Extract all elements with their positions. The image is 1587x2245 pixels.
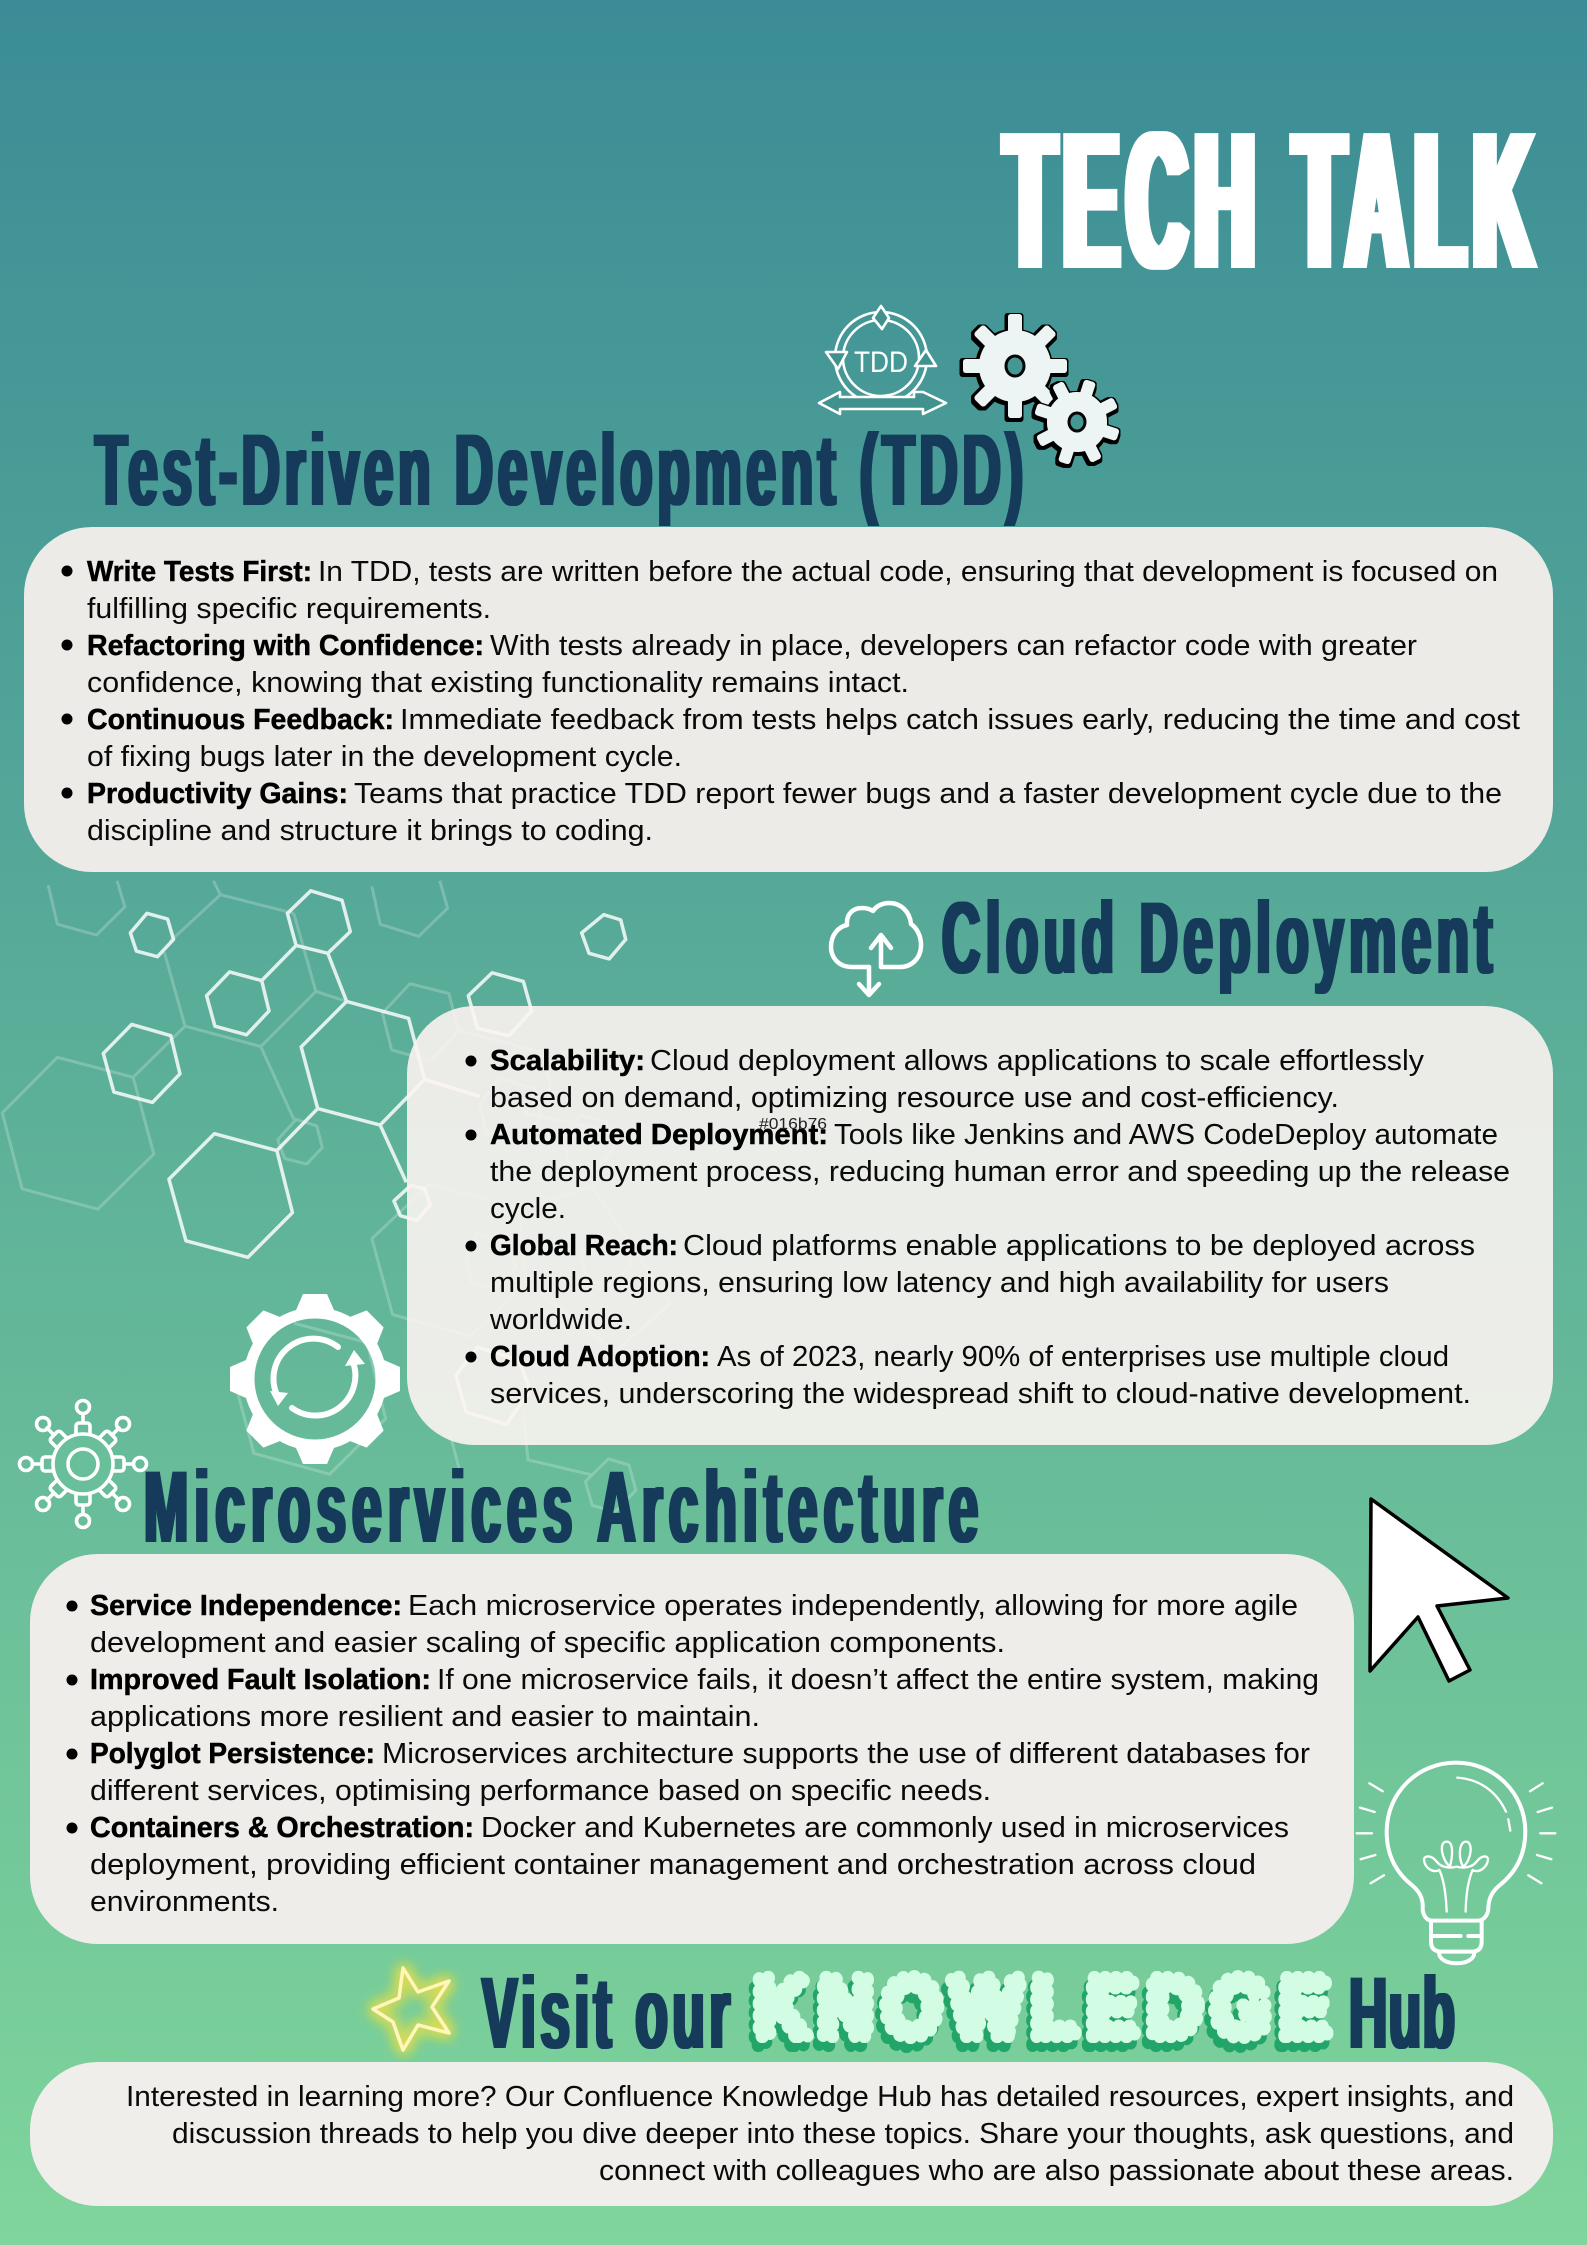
panel: microservices bbox=[30, 1554, 1354, 1944]
heading: Microservices Architecture: Microservices Architecture bbox=[144, 1450, 978, 1565]
bullet list: microservices: Service Independence: bbox=[90, 1590, 402, 1622]
bullet list: microservices: different services, optimising performance based on specific needs. bbox=[90, 1775, 991, 1807]
icon: large gear bbox=[963, 314, 1067, 418]
icon: TDD cycle: TDD bbox=[854, 346, 908, 379]
hexagon network decoration bbox=[2, 881, 670, 1512]
bullet list: TDD: Productivity Gains: bbox=[87, 778, 348, 810]
heading: Cloud Deployment: Cloud Deployment bbox=[942, 881, 1492, 996]
bullet list: microservices: applications more resilient and easier to maintain. bbox=[90, 1701, 760, 1733]
bullet list: cloud: Cloud platforms enable applications to be deployed across bbox=[683, 1230, 1475, 1262]
heading: KNOWLEDGE bubble word: KNOWLEDGE bbox=[754, 1960, 1330, 2054]
heading: Visit our: Visit our bbox=[482, 1956, 730, 2071]
callout text: discussion threads to help you dive deeper into these topics. Share your thoughts, ask questions, and bbox=[172, 2118, 1514, 2150]
bullet list: cloud: based on demand, optimizing resource use and cost-efficiency. bbox=[490, 1082, 1339, 1114]
panel: knowledge hub bbox=[30, 2062, 1553, 2206]
bullet list: microservices: Each microservice operates independently, allowing for more agile bbox=[408, 1590, 1298, 1622]
stray colour label: #016b76 bbox=[759, 1116, 827, 1133]
bullet list: cloud: Global Reach: bbox=[490, 1230, 678, 1262]
bullet list: cloud: cycle. bbox=[490, 1193, 566, 1225]
callout text: Interested in learning more? Our Confluence Knowledge Hub has detailed resources, expert insights, and bbox=[126, 2081, 1514, 2113]
bullet list: TDD: In TDD, tests are written before the actual code, ensuring that development is focused on bbox=[318, 556, 1498, 588]
bullet list: microservices: Microservices architecture supports the use of different databases for bbox=[382, 1738, 1310, 1770]
panel: test-driven development bbox=[24, 527, 1553, 872]
bullet list: TDD: Refactoring with Confidence: bbox=[87, 630, 484, 662]
bullet list: cloud: Scalability: bbox=[490, 1045, 645, 1077]
icon: light bulb bbox=[1357, 1763, 1555, 1963]
bullet list: microservices: deployment, providing efficient container management and orchestration across cloud bbox=[90, 1849, 1256, 1881]
bullet list: TDD: With tests already in place, developers can refactor code with greater bbox=[490, 630, 1417, 662]
bullet list: microservices: If one microservice fails, it doesn’t affect the entire system, making bbox=[437, 1664, 1319, 1696]
bullet list: TDD: of fixing bugs later in the development cycle. bbox=[87, 741, 682, 773]
bullet list: microservices: Containers & Orchestration: bbox=[90, 1812, 474, 1844]
heading: Hub: Hub bbox=[1349, 1956, 1455, 2071]
icon: microservices gear bbox=[20, 1400, 146, 1528]
bullet list: TDD: Immediate feedback from tests helps catch issues early, reducing the time and cost bbox=[400, 704, 1520, 736]
bullet list: TDD: Continuous Feedback: bbox=[87, 704, 394, 736]
bullet list: TDD bbox=[62, 556, 1520, 847]
bullet list: cloud: the deployment process, reducing human error and speeding up the release bbox=[490, 1156, 1510, 1188]
bullet list: cloud bbox=[466, 1045, 1510, 1410]
bullet list: TDD: discipline and structure it brings to coding. bbox=[87, 815, 653, 847]
bullet list: cloud: Cloud deployment allows applications to scale effortlessly bbox=[650, 1045, 1425, 1077]
bullet list: TDD: fulfilling specific requirements. bbox=[87, 593, 491, 625]
bullet list: cloud: services, underscoring the widespread shift to cloud-native development. bbox=[490, 1378, 1471, 1410]
bullet list: TDD: confidence, knowing that existing functionality remains intact. bbox=[87, 667, 909, 699]
bullet list: cloud: Cloud Adoption: bbox=[490, 1341, 710, 1373]
heading: Test-Driven Development: Test-Driven Development (TDD) bbox=[95, 413, 1023, 528]
bullet list: cloud: Tools like Jenkins and AWS CodeDeploy automate bbox=[834, 1119, 1498, 1151]
bullet list: microservices bbox=[66, 1590, 1319, 1918]
icon: gear with sync arrows bbox=[230, 1294, 400, 1464]
panel: cloud deployment bbox=[407, 1006, 1553, 1445]
bullet list: TDD: Teams that practice TDD report fewer bugs and a faster development cycle due to the bbox=[354, 778, 1502, 810]
bullet list: microservices: Docker and Kubernetes are commonly used in microservices bbox=[481, 1812, 1289, 1844]
bullet list: cloud: As of 2023, nearly 90% of enterprises use multiple cloud bbox=[717, 1341, 1449, 1373]
callout text bbox=[126, 2081, 1514, 2187]
icon: mouse cursor bbox=[1370, 1499, 1508, 1681]
icon: cloud upload and download bbox=[831, 903, 921, 995]
bullet list: cloud: worldwide. bbox=[489, 1304, 632, 1336]
gear holes bbox=[1006, 356, 1085, 431]
icon: small gear bbox=[1023, 368, 1131, 476]
bullet list: cloud: Automated Deployment: bbox=[490, 1119, 828, 1151]
bullet list: microservices: Polyglot Persistence: bbox=[90, 1738, 375, 1770]
title: TECH TALK bbox=[1005, 91, 1533, 310]
bullet list: TDD: Write Tests First: bbox=[87, 556, 312, 588]
bullet list: microservices: Improved Fault Isolation: bbox=[90, 1664, 431, 1696]
bullet list: cloud: multiple regions, ensuring low latency and high availability for users bbox=[490, 1267, 1389, 1299]
icon: glowing star bbox=[373, 1968, 449, 2050]
bullet list: microservices: development and easier scaling of specific application components. bbox=[90, 1627, 1005, 1659]
callout text: connect with colleagues who are also passionate about these areas. bbox=[599, 2155, 1514, 2187]
icon: TDD cycle bbox=[819, 306, 946, 414]
bullet list: microservices: environments. bbox=[90, 1886, 279, 1918]
